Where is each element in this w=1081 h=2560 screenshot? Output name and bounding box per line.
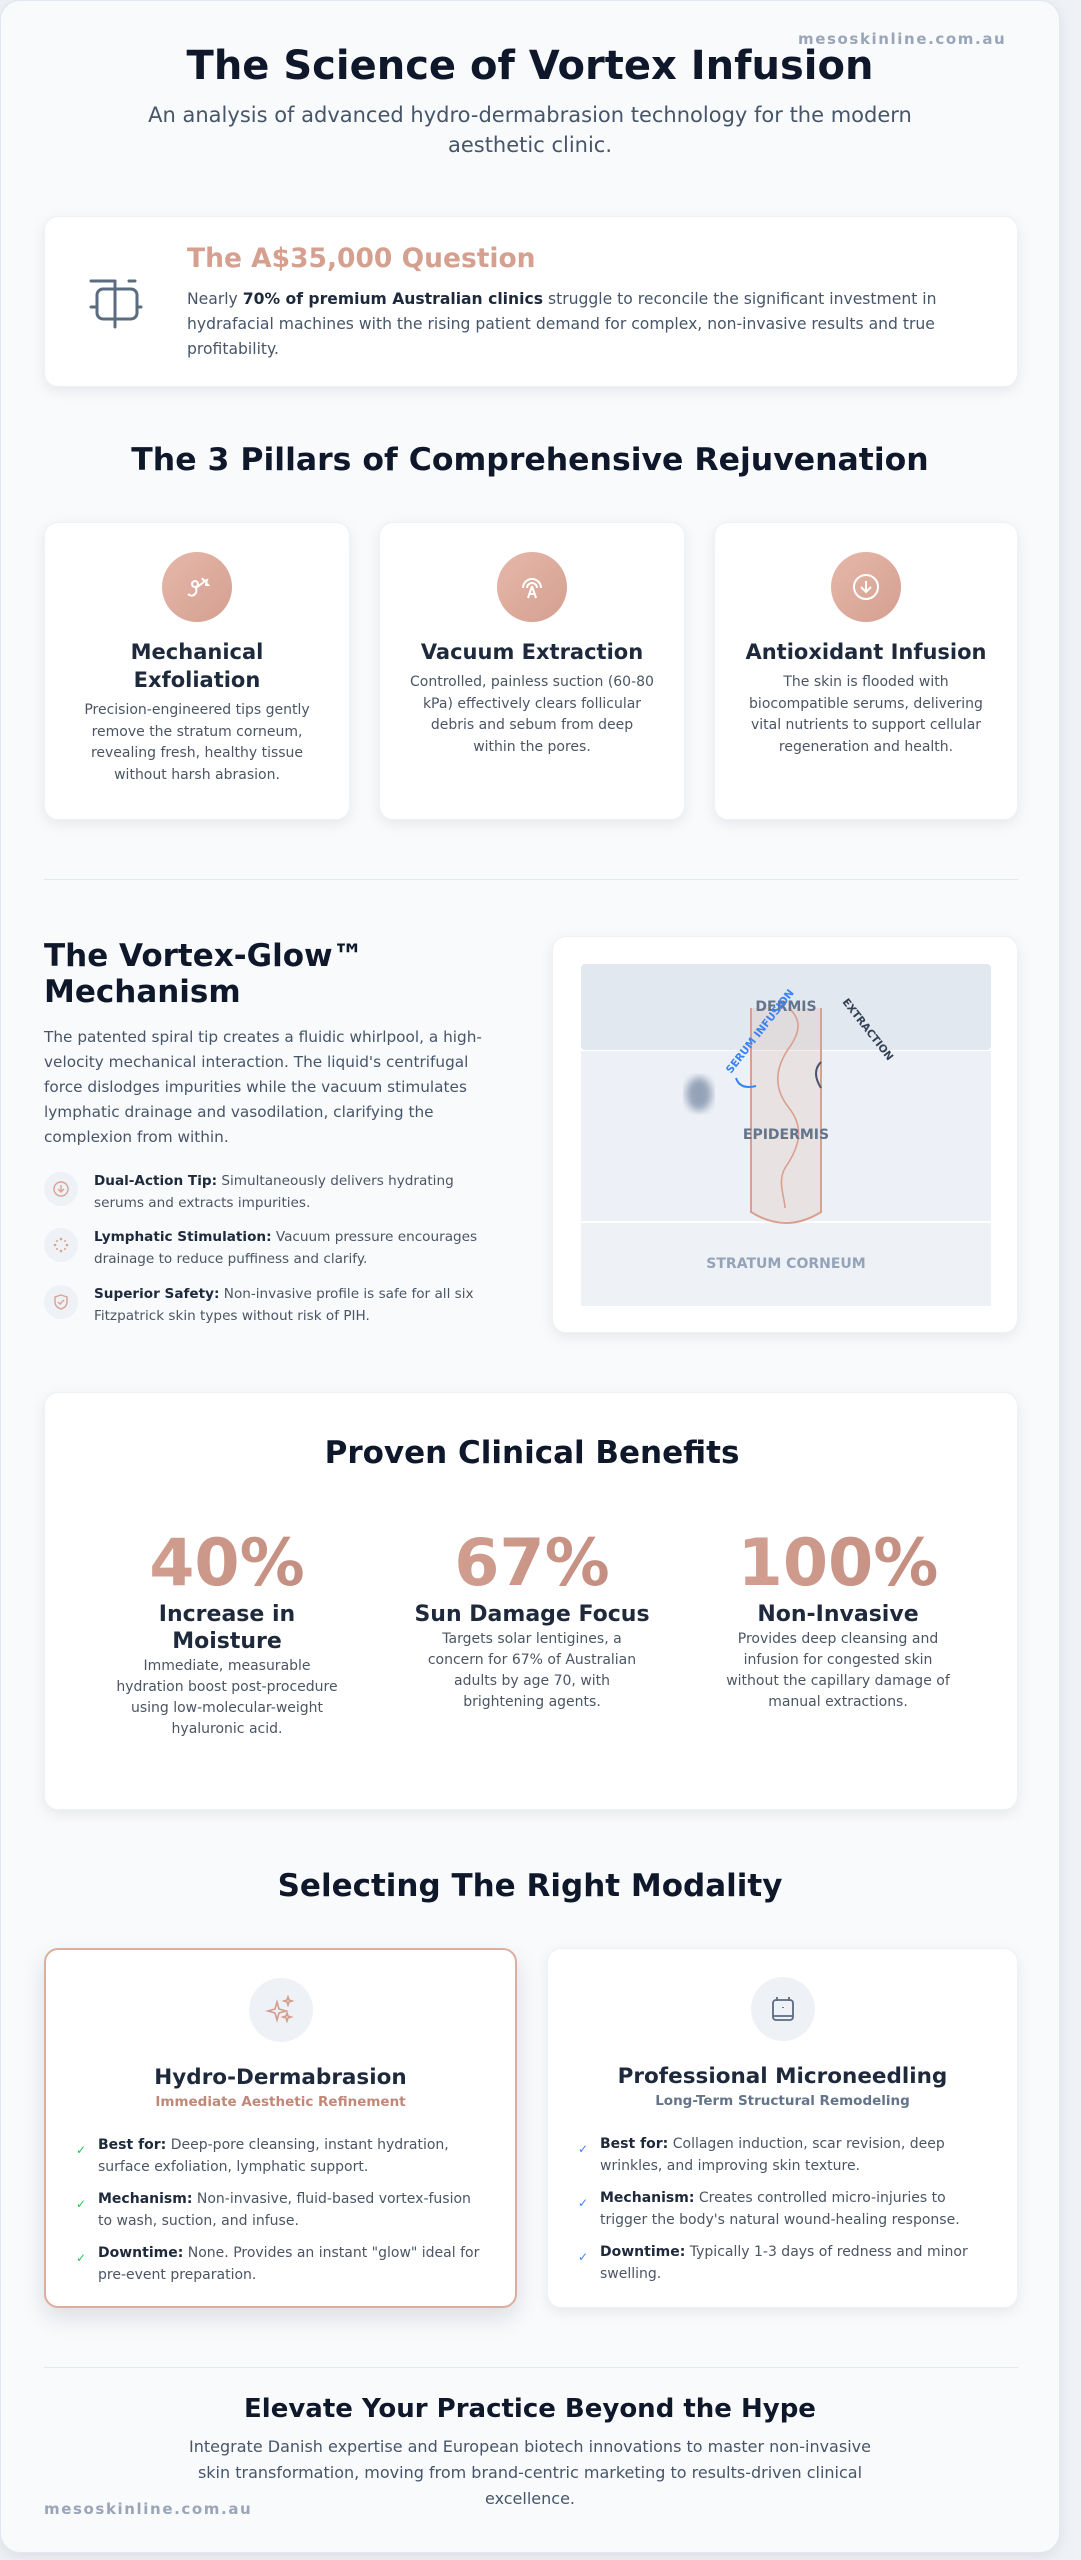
panel: skin diagram: SERUM INFUSION	[724, 987, 797, 1076]
panel: pillar 2	[379, 522, 685, 820]
panel: hydro-dermabrasion: Best for: Deep-pore cleansing, instant hydration, surface exfoliation, lymphatic support.	[98, 2137, 449, 2175]
panel: hydro-dermabrasion	[44, 1948, 517, 2308]
panel: microneedling	[547, 1948, 1018, 2308]
panel: question card	[44, 216, 1018, 387]
panel: microneedling: Long-Term Structural Remodeling	[655, 2093, 910, 2109]
panel: microneedling: ✓	[578, 2250, 588, 2264]
stat: 67%: 67%	[454, 1526, 610, 1601]
watermark top: mesoskinline.com.au	[798, 30, 1006, 48]
panel: pillar 3	[714, 522, 1018, 820]
stat: 40%: Immediate, measurable hydration boost post-procedure using low-molecular-weight hyaluronic acid.	[116, 1658, 338, 1737]
icon: vacuum	[497, 552, 567, 622]
panel: hydro-dermabrasion: ✓	[76, 2251, 86, 2265]
benefits heading: Proven Clinical Benefits	[325, 1435, 739, 1471]
question heading: The A$35,000 Question	[187, 243, 536, 274]
stat: 40%: Increase in Moisture	[159, 1602, 295, 1654]
watermark bottom: mesoskinline.com.au	[44, 2500, 252, 2518]
footer text: Integrate Danish expertise and European biotech innovations to master non-invasive skin transformation, moving from brand-centric marketing to results-driven clinical excellence.	[189, 2437, 871, 2508]
icon: device	[750, 1977, 814, 2041]
panel: pillar 2: Controlled, painless suction (60-80 kPa) effectively clears follicular debris and sebum from deep within the pores.	[410, 674, 654, 754]
blur blob	[686, 1077, 712, 1111]
icon: infusion	[831, 552, 901, 622]
panel: skin diagram: EXTRACTION	[840, 996, 895, 1063]
panel: pillar 1	[44, 522, 350, 820]
panel: hydro-dermabrasion: Mechanism: Non-invasive, fluid-based vortex-fusion to wash, suction, and infuse.	[98, 2191, 471, 2229]
panel: microneedling: ✓	[578, 2142, 588, 2156]
stat: 100%	[726, 1526, 950, 1710]
panel: clinical benefits	[44, 1392, 1018, 1810]
panel: pillar 1: Mechanical Exfoliation	[131, 640, 263, 692]
stat: 40%	[116, 1526, 338, 1737]
bullet: dual action: Dual-Action Tip: Simultaneously delivers hydrating serums and extracts impurities.	[94, 1173, 454, 1211]
panel: microneedling: Professional Microneedling	[618, 2064, 947, 2089]
panel: hydro-dermabrasion: ✓	[76, 2197, 86, 2211]
panel: pillar 3: The skin is flooded with biocompatible serums, delivering vital nutrients to support cellular regeneration and health.	[749, 674, 983, 754]
stat: 67%: Targets solar lentigines, a concern for 67% of Australian adults by age 70, with brightening agents.	[428, 1631, 636, 1710]
panel: hydro-dermabrasion: Downtime: None. Provides an instant "glow" ideal for pre-event preparation.	[98, 2245, 479, 2283]
question text: Nearly 70% of premium Australian clinics struggle to reconcile the significant investment in hydrafacial machines with the rising patient demand for complex, non-invasive results and true profitability.	[187, 290, 936, 358]
heading: footer: Elevate Your Practice Beyond the Hype	[244, 2394, 816, 2424]
panel: microneedling: Downtime: Typically 1-3 days of redness and minor swelling.	[600, 2244, 968, 2282]
heading: modality: Selecting The Right Modality	[278, 1868, 782, 1904]
tip	[751, 1008, 821, 1223]
icon: machine	[90, 280, 142, 328]
icon: exfoliation	[162, 552, 232, 622]
bullet: safety: Superior Safety: Non-invasive profile is safe for all six Fitzpatrick skin types without risk of PIH.	[94, 1286, 474, 1324]
mechanism paragraph: The patented spiral tip creates a fluidic whirlpool, a high-velocity mechanical interaction. The liquid's centrifugal force dislodges impurities while the vacuum stimulates lymphatic drainage and vasodilation, clarifying the complexion from within.	[44, 1028, 482, 1146]
heading: pillars: The 3 Pillars of Comprehensive Rejuvenation	[131, 442, 929, 478]
panel: hydro-dermabrasion: Immediate Aesthetic Refinement	[155, 2094, 406, 2110]
stat: 100%: Provides deep cleansing and infusion for congested skin without the capillary damage of manual extractions.	[726, 1631, 950, 1710]
stat: 100%: 100%	[738, 1526, 938, 1601]
heading: mechanism: The Vortex-Glow™ Mechanism	[44, 938, 364, 1010]
panel: microneedling: Mechanism: Creates controlled micro-injuries to trigger the body's natural wound-healing response.	[600, 2190, 960, 2228]
panel: microneedling: Best for: Collagen induction, scar revision, deep wrinkles, and improving skin texture.	[600, 2136, 945, 2174]
panel: skin diagram	[552, 936, 1018, 1333]
panel: microneedling: ✓	[578, 2196, 588, 2210]
panel: skin diagram: DERMIS	[755, 999, 817, 1015]
subtitle: An analysis of advanced hydro-dermabrasion technology for the modern aesthetic clinic.	[148, 103, 912, 157]
panel: hydro-dermabrasion: ✓	[76, 2143, 86, 2157]
icon: sparkles	[248, 1978, 312, 2042]
title: The Science of Vortex Infusion	[187, 43, 873, 89]
stat: 67%: Sun Damage Focus	[414, 1602, 650, 1627]
panel: pillar 1: Precision-engineered tips gently remove the stratum corneum, revealing fresh, healthy tissue without harsh abrasion.	[84, 702, 310, 782]
bullet: lymphatic: Lymphatic Stimulation: Vacuum pressure encourages drainage to reduce puffiness and clarify.	[94, 1229, 477, 1267]
panel: pillar 3: Antioxidant Infusion	[745, 640, 987, 664]
stat: 40%: 40%	[149, 1526, 305, 1601]
panel: hydro-dermabrasion: Hydro-Dermabrasion	[154, 2065, 407, 2090]
stat: 67%	[414, 1526, 650, 1710]
panel: skin diagram: STRATUM CORNEUM	[706, 1256, 866, 1272]
panel: pillar 2: Vacuum Extraction	[421, 640, 643, 664]
stat: 100%: Non-Invasive	[757, 1602, 919, 1627]
panel: skin diagram: EPIDERMIS	[743, 1127, 829, 1143]
